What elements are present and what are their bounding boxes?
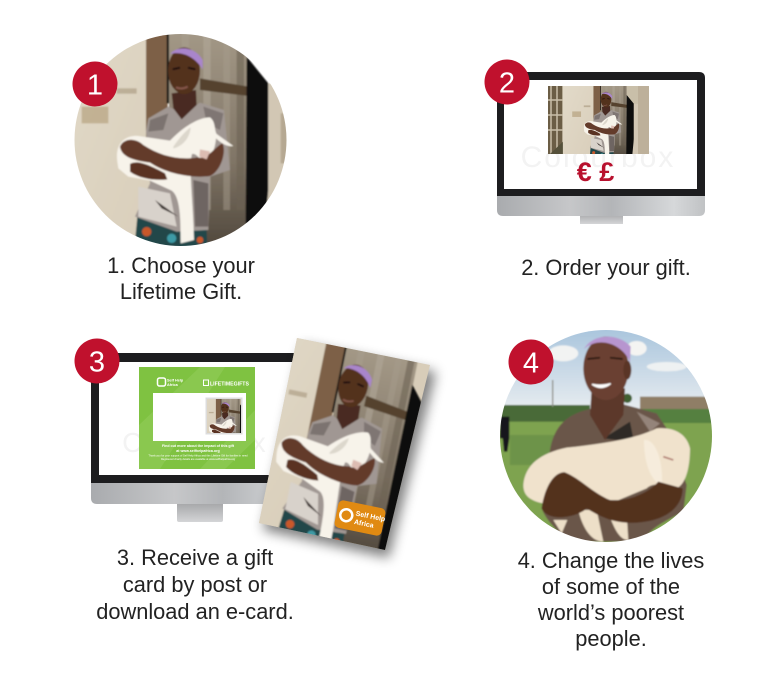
panel: step 3 (74, 338, 442, 619)
card text: Thank you for your support of Self Help Africa and this Lifetime Gift for families in need (148, 454, 248, 458)
logo: Self Help Africa badge: Self Help (355, 511, 386, 523)
logo: Self Help Africa badge (334, 499, 387, 537)
watermark: Colourbox (122, 427, 268, 458)
photo: woman with goat on screen (548, 86, 649, 154)
badge: number 4: 4 (523, 348, 539, 380)
badge: number 1 (72, 62, 118, 106)
card text: at www.selfhelpafrica.org (176, 449, 220, 453)
caption: step 3: card by post or (123, 572, 267, 597)
panel: step 4 (500, 330, 712, 650)
logo: Self Help Africa (158, 378, 184, 387)
currency symbols: € £ (577, 157, 614, 187)
caption: step 4: 4. Change the lives (518, 548, 704, 573)
card text: Registered charity details are available at www.selfhelpafrica.org (161, 457, 236, 461)
badge: number 3: 3 (89, 346, 105, 378)
badge: number 2: 2 (499, 68, 515, 100)
monitor: e-card on screen (91, 353, 294, 522)
badge: number 4 (508, 340, 554, 384)
logo: Lifetime Gifts: LIFETIMEGIFTS (210, 382, 249, 388)
photo: woman holding goat in circle (74, 34, 286, 246)
photo: small print (206, 398, 242, 434)
caption: step 4: of some of the (542, 574, 680, 599)
panel: step 2 (484, 60, 705, 280)
badge: number 3 (74, 338, 120, 384)
caption: step 1: 1. Choose your (107, 253, 255, 278)
badge: number 1: 1 (87, 70, 103, 102)
card: printed gift card (256, 338, 442, 565)
card text: Find out more about the impact of this gift (162, 444, 235, 448)
panel: step 1 (72, 34, 286, 299)
caption: step 3: download an e-card. (96, 599, 294, 624)
caption: step 4: world’s poorest (537, 600, 684, 625)
monitor: order screen (497, 72, 705, 224)
badge: number 2 (484, 60, 530, 104)
caption: step 2: 2. Order your gift. (521, 255, 691, 280)
card text (148, 444, 248, 461)
caption: step 4: people. (575, 626, 647, 651)
caption: step 1: Lifetime Gift. (120, 279, 242, 304)
logo: Self Help Africa badge: Africa (353, 519, 374, 530)
logo: Self Help Africa: Africa (167, 383, 179, 387)
photo: smiling woman with goat in field (500, 330, 712, 542)
watermark: Colourbox (521, 141, 675, 174)
caption: step 3: 3. Receive a gift (117, 545, 273, 570)
logo: Self Help Africa: Self Help (167, 378, 184, 382)
e-card: green gift card (139, 367, 255, 469)
